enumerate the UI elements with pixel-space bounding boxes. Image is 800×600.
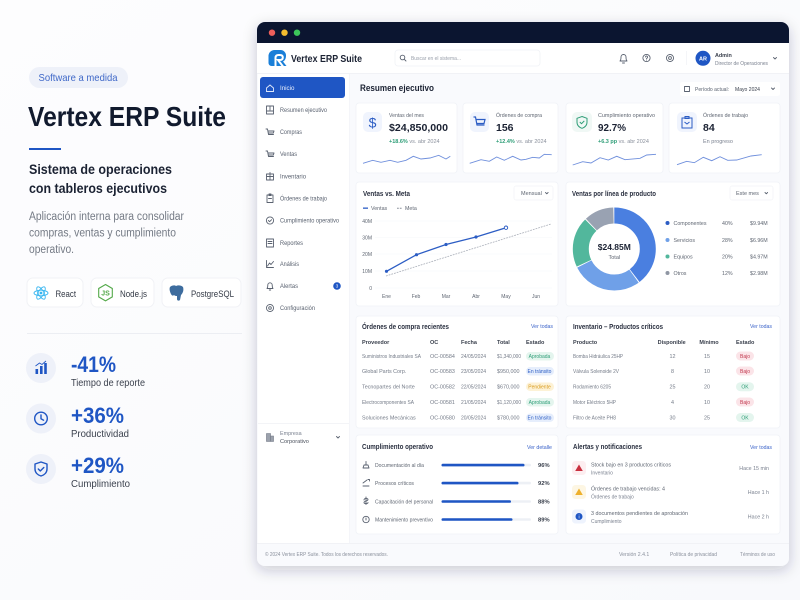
dropdown: Este mes <box>736 191 759 197</box>
tech chips <box>27 278 241 307</box>
table row 4: Motor Eléctrico 5HP <box>573 400 616 406</box>
icon: bar chart <box>36 361 47 374</box>
table row 1: Bomba Hidráulica 25HP <box>573 354 623 360</box>
company selector: Corporativo <box>280 439 309 445</box>
table row 5 <box>362 414 554 422</box>
title: Vertex ERP Suite <box>28 101 226 132</box>
chip: Node.js: Node.js <box>120 289 147 299</box>
KPI: cumplimiento operativo: +6.3 pp vs. abr 2024 <box>598 139 649 145</box>
table row 1: $1,340,000 <box>497 354 521 360</box>
subtitle <box>29 162 172 196</box>
legend: $4.97M <box>750 254 768 260</box>
table row 4: 4 <box>671 400 674 406</box>
line chart: 20M <box>362 252 372 258</box>
panel: cumplimiento operativo <box>356 435 558 534</box>
alert: órdenes vencidas: Órdenes de trabajo <box>591 494 634 500</box>
nav item: Análisis <box>266 260 299 268</box>
line chart: 0 <box>369 286 372 292</box>
stat: tiempo de reporte: -41% <box>71 352 116 377</box>
footer: Política de privacidad <box>670 552 717 558</box>
chip: React <box>27 278 83 307</box>
heading: Ventas por línea de producto <box>572 189 656 198</box>
nav item: Alertas <box>267 282 341 290</box>
stat: productividad: Productividad <box>71 428 129 440</box>
line chart: Abr <box>472 294 480 300</box>
KPI: ventas del mes: $24,850,000 <box>389 122 448 134</box>
footer: Versión 2.4.1 <box>619 552 649 558</box>
table row 4: 21/05/2024 <box>461 400 486 406</box>
table row 4: Bajo <box>740 400 750 406</box>
KPI: órdenes de trabajo: 84 <box>703 122 715 134</box>
table row 2 <box>573 366 754 376</box>
heading: Alertas y notificaciones <box>573 442 642 451</box>
progress row: documentación: Documentación al día <box>375 463 424 469</box>
chip: Node.js <box>91 278 154 307</box>
KPI: ventas del mes <box>356 103 457 173</box>
legend <box>666 221 768 277</box>
table row 5: OC-00580 <box>430 416 455 422</box>
badge: software a medida <box>29 67 128 88</box>
table row 5: 20/05/2024 <box>461 416 486 422</box>
alert: stock bajo: Hace 15 min <box>739 466 769 472</box>
top app bar <box>257 43 789 74</box>
panel: órdenes de compra recientes <box>356 316 558 428</box>
subtitle: Sistema de operaciones <box>29 162 172 177</box>
search box: Buscar en el sistema... <box>411 56 461 62</box>
table row 3: $670,000 <box>497 385 519 391</box>
table row 1: 12 <box>670 354 676 360</box>
table row 2: En tránsito <box>528 369 552 375</box>
table header <box>362 340 545 346</box>
alert: documentos pendientes <box>572 510 769 525</box>
table row 1: 15 <box>704 354 710 360</box>
table row 5: 30 <box>670 416 676 422</box>
table header: Estado <box>526 340 545 346</box>
KPI: órdenes de trabajo <box>669 103 780 173</box>
table row 1: Bajo <box>740 354 750 360</box>
panel: alertas y notificaciones <box>566 435 780 534</box>
panel: inventario productos críticos <box>566 316 780 428</box>
progress row: documentación: 96% <box>538 463 550 469</box>
description: operativo. <box>29 244 74 256</box>
progress row: procesos críticos <box>363 480 550 487</box>
table row 3: Pendiente <box>528 385 551 391</box>
alert: documentos pendientes: 3 documentos pendientes de aprobación <box>591 511 688 517</box>
footer <box>257 543 789 558</box>
nav item: Configuración: Configuración <box>280 305 316 312</box>
table row 3: OC-00582 <box>430 385 455 391</box>
alert: stock bajo <box>572 461 769 476</box>
table row 3: Rodamiento 6205 <box>573 385 611 391</box>
link: Ver todas <box>531 324 553 330</box>
heading: Ventas vs. Meta <box>363 189 411 198</box>
icon: clock <box>35 412 47 425</box>
nav item: Compras <box>266 129 302 136</box>
table row 4 <box>573 398 754 406</box>
line chart: Ene <box>382 294 391 300</box>
icon: dollar: $ <box>369 114 377 130</box>
icon: help <box>643 54 650 62</box>
footer: © 2024 Vertex ERP Suite. Todos los derechos reservados. <box>265 551 388 558</box>
nav item: Inicio (active): Inicio <box>280 85 295 92</box>
stat: cumplimiento <box>26 453 130 490</box>
nav item: Alertas: Alertas <box>280 283 298 290</box>
period selector: Mayo 2024 <box>735 87 760 93</box>
KPI: cumplimiento operativo <box>566 103 663 173</box>
table row 2: $950,000 <box>497 369 519 375</box>
progress row: mantenimiento: 89% <box>538 518 550 524</box>
line chart: Mar <box>442 294 451 300</box>
description: compras, ventas y cumplimiento <box>29 228 176 240</box>
table row 3: 25 <box>670 385 676 391</box>
legend: $6.96M <box>750 238 768 244</box>
line chart: 30M <box>362 236 372 242</box>
table row 3: 20 <box>704 385 710 391</box>
icon: settings gear <box>666 54 674 62</box>
heading: Cumplimiento operativo <box>362 442 433 451</box>
table row 3 <box>362 382 554 391</box>
progress row: mantenimiento <box>363 516 550 524</box>
KPI: ventas del mes: Ventas del mes <box>389 113 424 119</box>
sparkline <box>677 155 762 165</box>
KPI: órdenes de trabajo: Órdenes de trabajo <box>703 112 748 119</box>
table row 1: OC-00584 <box>430 354 455 360</box>
table row 2: 23/05/2024 <box>461 369 486 375</box>
line chart: Feb <box>412 294 421 300</box>
table row 5: En tránsito <box>528 416 552 422</box>
table row 4: Aprobada <box>529 400 551 406</box>
chip: PostgreSQL <box>162 278 241 307</box>
KPI: ventas del mes: +18.6% vs. abr 2024 <box>389 139 440 145</box>
logo <box>268 50 286 66</box>
sparkline <box>470 154 552 163</box>
progress row: procesos críticos: Procesos críticos <box>375 481 414 487</box>
nav item: Análisis: Análisis <box>280 261 299 268</box>
icon: shield <box>35 462 47 476</box>
line chart: May <box>501 294 511 300</box>
link: Ver todas <box>750 445 772 451</box>
period selector: Período actual: <box>695 87 729 93</box>
left intro panel <box>26 67 242 490</box>
table row 1 <box>362 352 554 360</box>
app window <box>257 22 789 566</box>
sparkline <box>363 155 450 163</box>
alert: órdenes vencidas <box>572 485 769 500</box>
nav item: Alertas: 3 <box>336 284 339 290</box>
sparkline <box>573 154 656 165</box>
legend: 28% <box>722 238 733 244</box>
table row 3: Tecnopartes del Norte <box>362 385 415 391</box>
table header: Disponible <box>658 340 686 346</box>
table row 5: Soluciones Mecánicas <box>362 416 416 422</box>
stat: cumplimiento: +29% <box>71 453 124 478</box>
table header: Estado <box>736 340 755 346</box>
table row 3: 22/05/2024 <box>461 385 486 391</box>
table row 4: 10 <box>704 400 710 406</box>
table row 1: Aprobada <box>529 354 551 360</box>
table row 2: OC-00583 <box>430 369 455 375</box>
table row 4: OC-00581 <box>430 400 455 406</box>
sidebar <box>258 74 350 543</box>
progress row: capacitación: Capacitación del personal <box>375 500 433 506</box>
legend: Otros <box>674 271 687 277</box>
table row 4 <box>362 398 554 406</box>
table header: Fecha <box>461 340 478 346</box>
legend: Ventas <box>371 206 388 212</box>
table row 4: $1,120,000 <box>497 400 521 406</box>
table header: Total <box>497 340 510 346</box>
line chart: 40M <box>362 219 372 225</box>
table row 5 <box>573 413 754 422</box>
legend: 40% <box>722 221 733 227</box>
nav item: Resumen ejecutivo <box>266 106 327 114</box>
legend: 12% <box>722 271 733 277</box>
alert: órdenes vencidas: Hace 1 h <box>748 490 769 496</box>
alert: documentos pendientes: i <box>578 514 580 520</box>
table header: Mínimo <box>699 340 719 346</box>
table row 2: Válvula Solenoide 2V <box>573 369 619 375</box>
KPI: órdenes de compra: +12.4% vs. abr 2024 <box>496 139 547 145</box>
nav item: Órdenes de trabajo: Órdenes de trabajo <box>280 196 327 202</box>
alert: stock bajo: Stock bajo en 3 productos críticos <box>591 462 671 468</box>
KPI: órdenes de trabajo: En progreso <box>703 139 733 145</box>
legend: Equipos <box>674 254 693 260</box>
nav item: Resumen ejecutivo: Resumen ejecutivo <box>280 107 327 114</box>
alert: stock bajo: Inventario <box>591 470 613 476</box>
heading: Órdenes de compra recientes <box>362 322 449 331</box>
line chart: 10M <box>362 269 372 275</box>
legend: Meta <box>405 206 417 212</box>
table row 3 <box>573 382 754 391</box>
period selector <box>680 82 780 96</box>
stat: tiempo de reporte: Tiempo de reporte <box>71 377 145 389</box>
table row 2: Bajo <box>740 369 750 375</box>
table row 2: 8 <box>671 369 674 375</box>
legend: $9.94M <box>750 221 768 227</box>
brand name: Vertex ERP Suite <box>291 54 362 65</box>
table row 2: Global Parts Corp. <box>362 369 406 375</box>
icon: bell <box>620 55 627 63</box>
legend <box>363 206 417 212</box>
alert: órdenes vencidas: Órdenes de trabajo vencidas: 4 <box>591 486 665 492</box>
KPI: órdenes de compra <box>463 103 558 173</box>
title accent rule <box>29 148 61 150</box>
stat: tiempo de reporte <box>26 352 145 389</box>
footer: Términos de uso <box>740 552 775 558</box>
legend: $2.98M <box>750 271 768 277</box>
progress row: procesos críticos: 92% <box>538 481 550 487</box>
nav item: Configuración <box>266 304 316 312</box>
nav item: Inventario: Inventario <box>280 174 307 180</box>
company selector: Empresa <box>280 431 302 437</box>
table row 1: Suministros Industriales SA <box>362 354 421 360</box>
icon: clipboard <box>682 116 692 128</box>
link: Ver todas <box>750 324 772 330</box>
badge: software a medida: Software a medida <box>38 72 118 84</box>
stat: cumplimiento: Cumplimiento <box>71 478 130 490</box>
legend: Servicios <box>674 238 695 244</box>
progress row: documentación <box>363 462 550 469</box>
alert: documentos pendientes: Cumplimiento <box>591 519 622 525</box>
dropdown: Mensual <box>521 191 542 197</box>
table row 1: 24/05/2024 <box>461 354 486 360</box>
icon: cart <box>474 117 485 125</box>
user profile: Admin <box>715 53 732 59</box>
nav item: Órdenes de trabajo <box>267 194 327 202</box>
KPI: cumplimiento operativo: Cumplimiento operativo <box>598 113 655 119</box>
subtitle: con tableros ejecutivos <box>29 181 167 196</box>
user profile: Director de Operaciones <box>715 61 768 67</box>
dropdown <box>514 186 553 200</box>
chip: PostgreSQL: PostgreSQL <box>191 289 234 299</box>
table row 5: 25 <box>704 416 710 422</box>
table row 5: $780,000 <box>497 416 519 422</box>
table header <box>573 340 755 346</box>
table header: Proveedor <box>362 340 390 346</box>
window title bar <box>257 22 789 43</box>
nav item: Reportes: Reportes <box>280 240 303 247</box>
nav item: Reportes <box>266 239 303 247</box>
table header: Producto <box>573 340 598 346</box>
progress row: mantenimiento: Mantenimiento preventivo <box>375 518 433 524</box>
page heading: Resumen ejecutivo <box>360 83 434 93</box>
table header: OC <box>430 340 438 346</box>
table row 4: Electrocomponentes SA <box>362 400 414 406</box>
user profile: AR <box>699 56 707 62</box>
link: Ver detalle <box>527 445 552 451</box>
KPI: cumplimiento operativo: 92.7% <box>598 122 627 134</box>
panel: ventas por línea de producto <box>566 182 780 306</box>
progress row: capacitación <box>364 497 550 506</box>
nav item: Compras: Compras <box>280 129 302 136</box>
alert: documentos pendientes: Hace 2 h <box>748 514 769 520</box>
description: Aplicación interna para consolidar <box>29 211 184 223</box>
chip: Node.js: JS <box>101 290 110 298</box>
table row 2 <box>362 367 554 376</box>
company selector <box>266 431 340 445</box>
heading: Inventario – Productos críticos <box>573 322 663 331</box>
line chart: Jun <box>532 294 540 300</box>
legend: Componentes <box>674 221 707 227</box>
nav item: Inventario <box>266 172 307 180</box>
dropdown <box>730 186 773 200</box>
stat: productividad <box>26 403 129 440</box>
nav item: Cumplimiento operativo: Cumplimiento operativo <box>280 218 340 224</box>
panel: ventas vs meta <box>356 182 558 306</box>
user profile <box>696 51 776 67</box>
progress row: capacitación: 88% <box>538 500 550 506</box>
donut chart: Total <box>608 255 620 261</box>
table row 5: OK <box>741 416 749 422</box>
nav item: Inicio (active) <box>260 77 345 98</box>
chip: React: React <box>56 289 76 299</box>
description <box>29 211 184 256</box>
donut chart: $24.85M <box>598 242 631 252</box>
legend: 20% <box>722 254 733 260</box>
search box <box>395 50 540 66</box>
line chart <box>362 219 552 300</box>
table row 3: OK <box>741 385 749 391</box>
icon: shield check <box>577 116 587 128</box>
table row 5: Filtro de Aceite PH8 <box>573 416 616 422</box>
table row 1 <box>573 352 754 360</box>
table row 2: 10 <box>704 369 710 375</box>
stat: productividad: +36% <box>71 403 124 428</box>
nav item: Ventas <box>266 151 297 158</box>
KPI: órdenes de compra: Órdenes de compra <box>496 112 543 119</box>
donut chart <box>581 216 648 282</box>
KPI: órdenes de compra: 156 <box>496 122 514 134</box>
nav item: Ventas: Ventas <box>280 151 297 158</box>
